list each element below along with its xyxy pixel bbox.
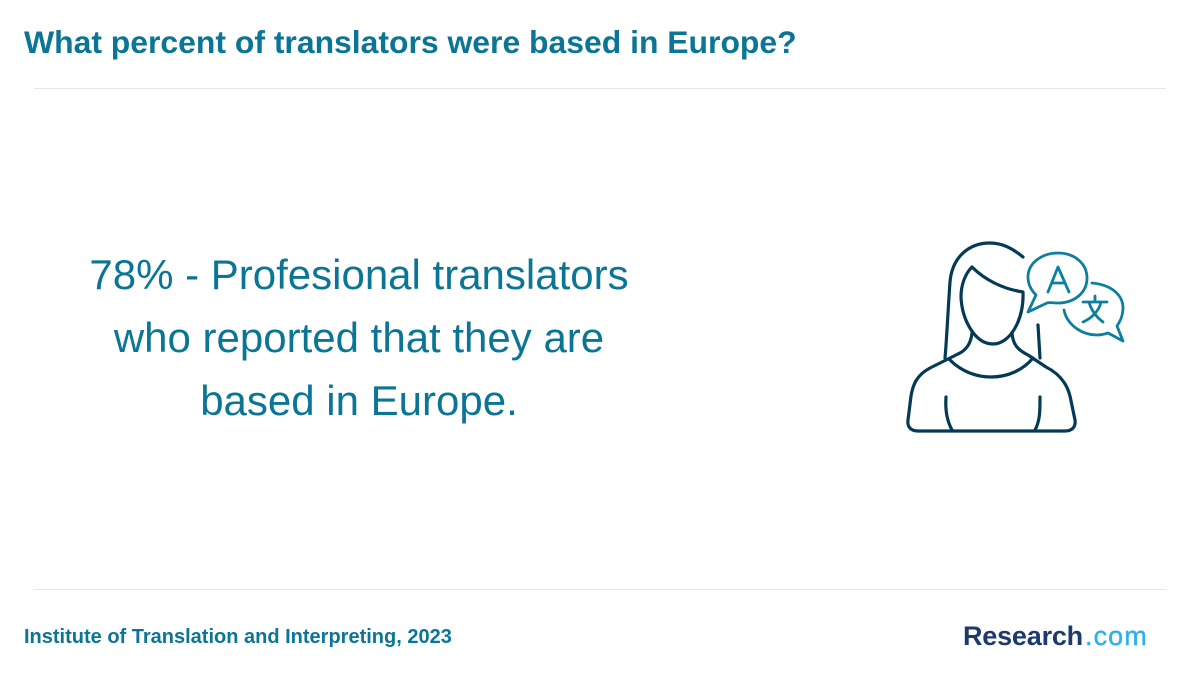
icon: woman figure	[908, 243, 1075, 431]
main statistic text: 78% - Profesional translators	[89, 251, 629, 298]
main statistic text: based in Europe.	[200, 377, 518, 424]
icon: speech bubble translation character	[1064, 283, 1123, 341]
icon: speech bubble A	[1028, 253, 1087, 312]
main statistic text: who reported that they are	[114, 314, 604, 361]
title: What percent of translators were based in Europe?	[24, 24, 797, 60]
source text: Institute of Translation and Interpreting, 2023	[24, 626, 452, 648]
logo: Research.com: Research.com	[963, 621, 1148, 651]
main statistic text	[89, 251, 629, 424]
